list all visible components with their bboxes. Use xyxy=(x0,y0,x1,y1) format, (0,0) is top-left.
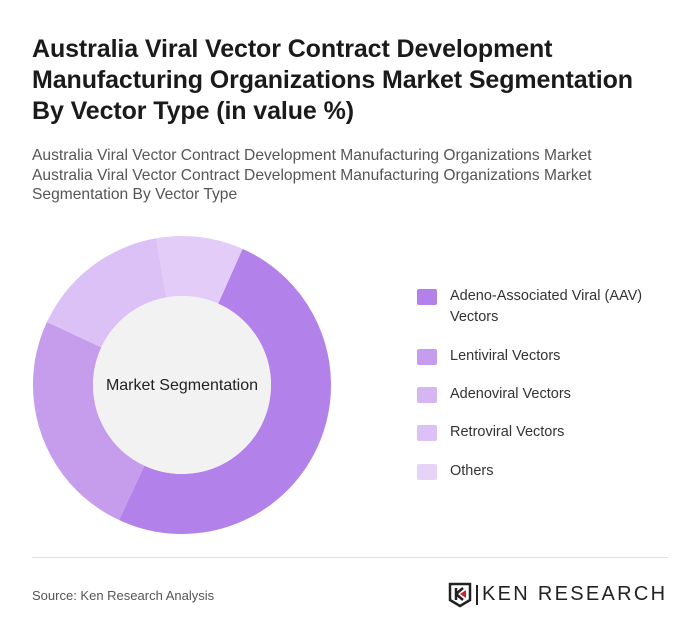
legend: Others xyxy=(417,463,494,480)
legend: AAV: Adeno-Associated Viral (AAV) Vectors xyxy=(450,288,642,325)
subtitle xyxy=(32,147,592,203)
legend: Lentiviral: Lentiviral Vectors xyxy=(450,348,560,364)
title: By Vector Type (in value %) xyxy=(32,97,354,125)
title xyxy=(32,35,633,125)
subtitle: Australia Viral Vector Contract Development Manufacturing Organizations Market xyxy=(32,147,592,164)
logo: KEN RESEARCH xyxy=(482,583,667,605)
legend: Retroviral: Retroviral Vectors xyxy=(450,424,564,440)
title: Australia Viral Vector Contract Development xyxy=(32,35,552,63)
subtitle: Segmentation By Vector Type xyxy=(32,186,237,203)
legend: Adenoviral: Adenoviral Vectors xyxy=(450,386,571,402)
legend: Others: Others xyxy=(450,463,494,479)
title: Manufacturing Organizations Market Segmentation xyxy=(32,66,633,94)
source: Source: Ken Research Analysis xyxy=(32,588,214,603)
donut chart: Market Segmentation xyxy=(106,377,258,394)
subtitle: Australia Viral Vector Contract Development Manufacturing Organizations Market xyxy=(32,166,592,184)
